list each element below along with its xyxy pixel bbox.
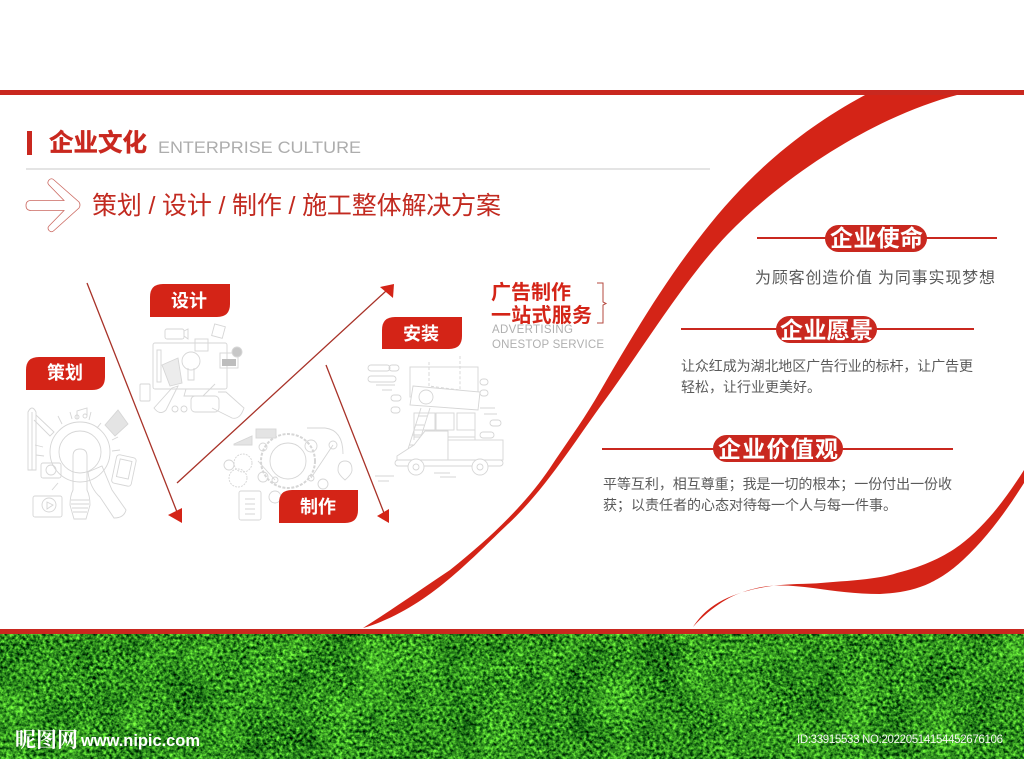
tag: install (382, 317, 462, 349)
subtitle: 策划 / 设计 / 制作 / 施工整体解决方案 (92, 192, 501, 220)
section: vision (681, 316, 974, 395)
icon: outline arrow (26, 179, 80, 232)
section: mission: 企业使命 (830, 225, 923, 251)
section: mission (755, 225, 997, 287)
section: vision: 企业愿景 (780, 317, 873, 343)
text block: advertising one-stop service: ADVERTISING (492, 324, 573, 336)
grass band (0, 634, 1024, 759)
main red swoosh (363, 95, 957, 628)
watermark: site: 昵图网 (15, 724, 78, 754)
heading: corporate culture: ENTERPRISE CULTURE (158, 138, 361, 157)
arrow: down from planning (87, 283, 182, 523)
section: vision: 让众红成为湖北地区广告行业的标杆，让广告更 (681, 358, 973, 374)
text block: advertising one-stop service: 一站式服务 (491, 304, 592, 327)
arrow: down from install (326, 365, 389, 523)
bottom red rule (0, 629, 1024, 634)
section: values: 获；以责任者的心态对待每一个人与每一件事。 (603, 497, 897, 514)
watermark: id: ID:33915533 NO:20220514154452676106 (797, 734, 1003, 746)
section: vision: 轻松，让行业更美好。 (681, 379, 821, 395)
watermark: site: www.nipic.com (80, 732, 200, 750)
illustration: design monitor (140, 324, 244, 418)
arrow: up to install (177, 284, 394, 483)
tag: production: 制作 (300, 497, 336, 517)
heading: corporate culture: 企业文化 (49, 129, 147, 157)
watermark: site (15, 724, 200, 754)
tag: design (150, 284, 230, 317)
text block: advertising one-stop service (491, 281, 606, 351)
section: values (602, 435, 953, 514)
tag: planning (26, 357, 105, 390)
illustration: planning bulb (28, 408, 137, 519)
illustration: install truck and shop (368, 356, 503, 481)
tag: install: 安装 (403, 324, 439, 344)
heading: corporate culture (27, 129, 361, 157)
text block: advertising one-stop service: 广告制作 (491, 281, 571, 304)
top red rule (0, 90, 1024, 95)
tag: planning: 策划 (47, 363, 83, 383)
text block: advertising one-stop service: ONESTOP SERVICE (492, 339, 604, 351)
tag: design: 设计 (171, 291, 207, 311)
section: mission: 为顾客创造价值 为同事实现梦想 (755, 269, 995, 287)
lower right red swoosh (693, 470, 1024, 627)
section: values: 企业价值观 (718, 436, 838, 462)
illustration: production gears (224, 428, 352, 520)
tag: production (279, 490, 358, 523)
section: values: 平等互利，相互尊重；我是一切的根本；一份付出一份收 (603, 476, 952, 493)
